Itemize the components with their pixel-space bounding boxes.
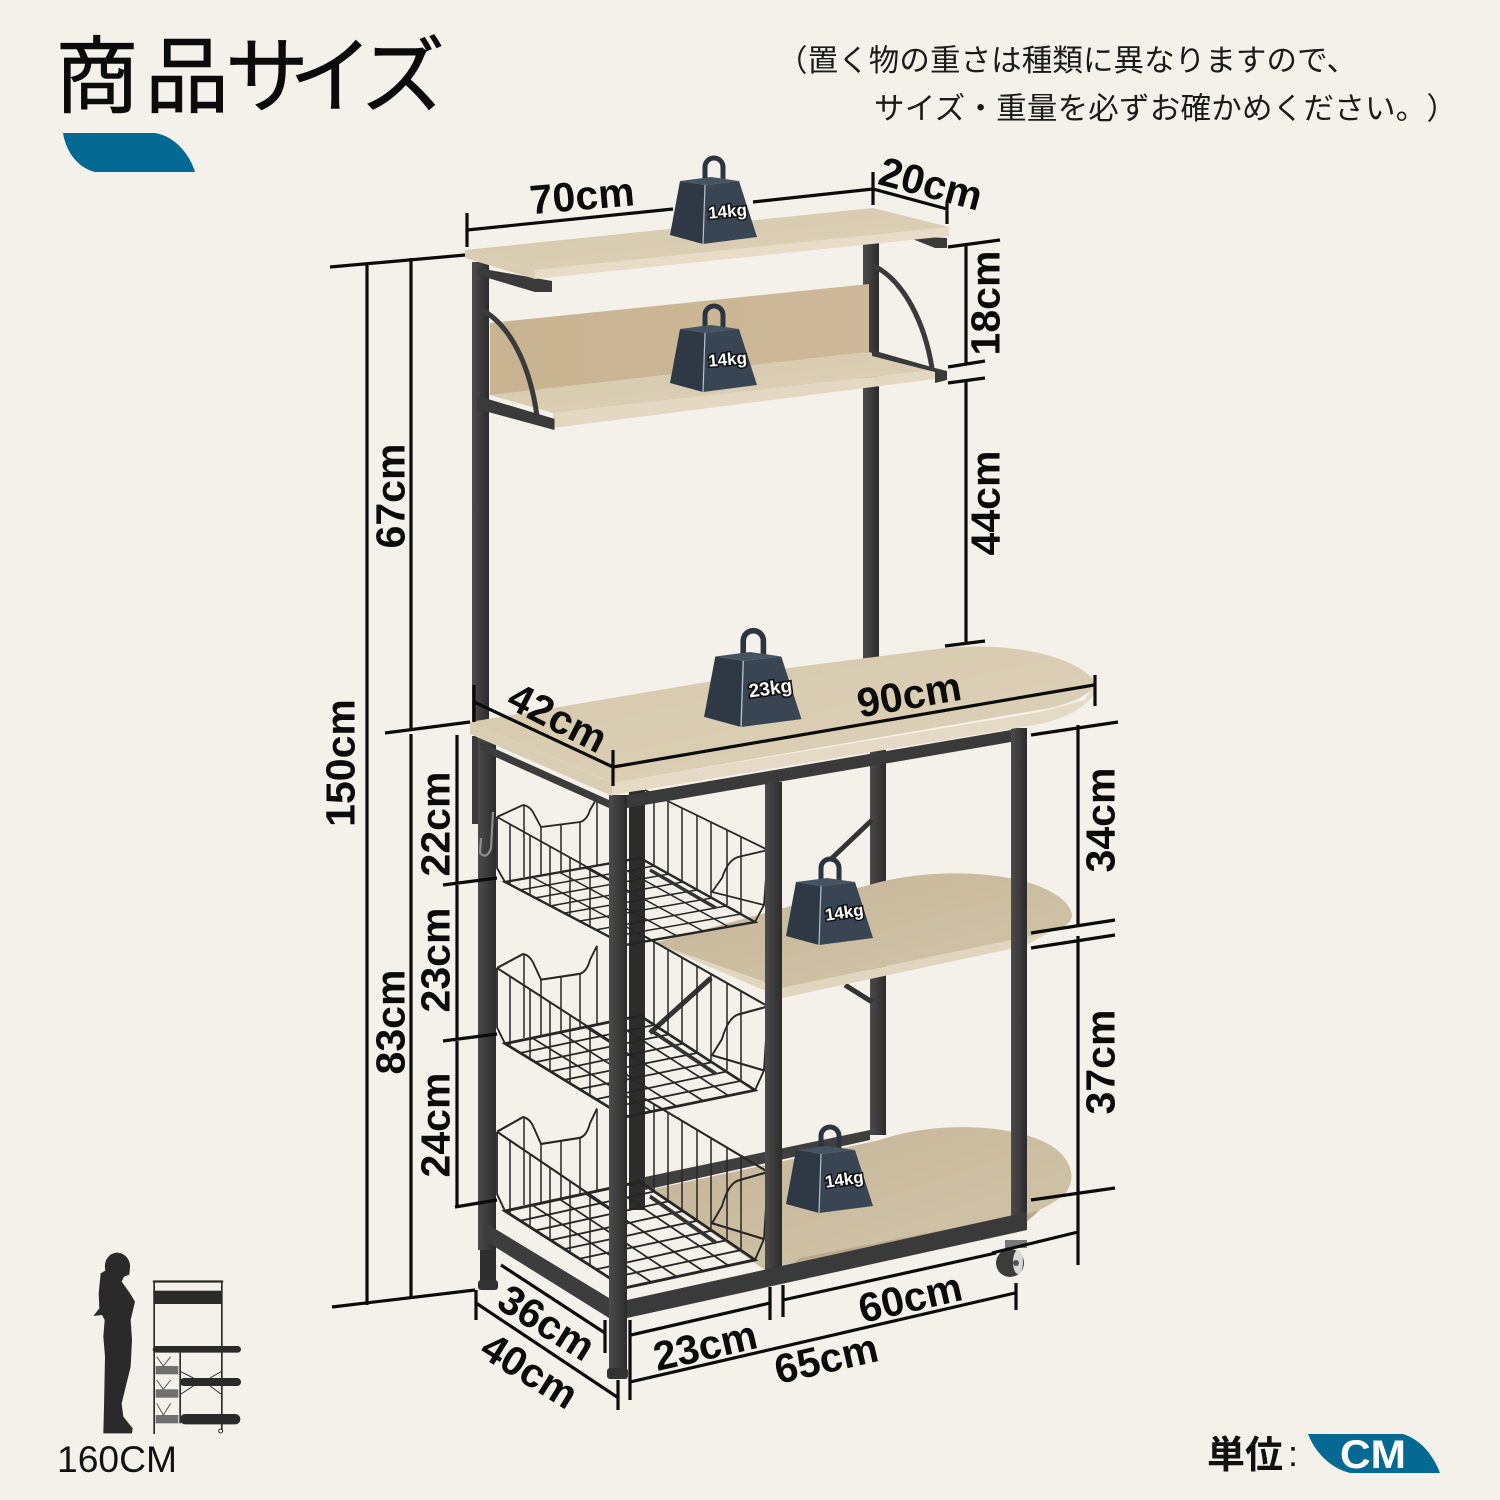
dimension: basket pitch 23cm: 23cm (412, 908, 458, 1012)
icon: miniature rack (153, 1280, 241, 1434)
weight: top shelf 14kg: 14kg (707, 200, 748, 223)
scale label: 160CM (57, 1439, 177, 1480)
dimension: lower section 83cm: 83cm (367, 970, 413, 1074)
dimension: lower shelf gap 37cm: 37cm (1077, 1010, 1123, 1114)
weight: middle shelf 14kg: 14kg (824, 900, 865, 925)
caster wheel (996, 1240, 1027, 1277)
title accent tab (63, 133, 195, 172)
dimension: outer depth 40cm (473, 1290, 618, 1418)
unit badge (1308, 1433, 1440, 1477)
dimension: depth 20cm: 20cm (874, 148, 987, 220)
weight: bottom shelf 14kg (786, 1127, 873, 1213)
dimension: overall height 150cm: 150cm (317, 699, 363, 827)
dimension: inner depth 36cm: 36cm (490, 1275, 603, 1370)
dimension: overall height 150cm (317, 255, 475, 1307)
diagonal braces (650, 820, 872, 1033)
note text: （置く物の重さは種類に異なりますので、 (777, 44, 1357, 78)
dimension: shelf gap 44cm: 44cm (962, 451, 1008, 555)
dimension: frame width 65cm (630, 1283, 1016, 1393)
dimension: open bay 60cm (783, 1253, 996, 1332)
dimension: lower shelf gap 34cm (1031, 722, 1123, 933)
dimension: basket pitch 24cm (412, 1041, 497, 1207)
unit colon: : (1288, 1433, 1298, 1474)
basket 1 (497, 790, 768, 945)
weight: middle shelf 14kg (786, 859, 873, 945)
dimension: width 70cm: 70cm (528, 168, 636, 223)
weight: top shelf 14kg (670, 158, 757, 244)
dimension: lower shelf gap 34cm: 34cm (1077, 768, 1123, 872)
title: 商品サイズ (55, 30, 445, 124)
upper shelf with backboard (479, 265, 947, 428)
dimension: outer depth 40cm: 40cm (473, 1323, 586, 1418)
dimension: shelf gap 44cm (945, 378, 1008, 646)
rack lower rear posts and back beam (629, 750, 886, 1210)
dimension: worktop width 90cm (613, 663, 1095, 786)
dimension: basket bay 23cm: 23cm (649, 1312, 761, 1380)
dimension: width 70cm (467, 168, 873, 247)
dimension: upper section 67cm: 67cm (367, 444, 413, 548)
dimension: basket pitch 24cm: 24cm (412, 1073, 458, 1177)
weight: bottom shelf 14kg: 14kg (824, 1167, 865, 1192)
unit badge: CM (1340, 1433, 1406, 1477)
worktop (470, 647, 1094, 796)
dimension: basket bay 23cm (630, 1287, 770, 1400)
rack front frame (472, 728, 1027, 1379)
weight: upper shelf 14kg: 14kg (707, 348, 748, 371)
dimension: shelf gap 18cm (948, 240, 1008, 367)
hook on side post (480, 812, 493, 856)
rack upper rear posts (472, 240, 879, 727)
bottom shelf (650, 1127, 1071, 1270)
dimension: basket pitch 22cm (412, 735, 497, 885)
dimension: basket pitch 22cm: 22cm (412, 772, 458, 876)
unit label: 単位 (1207, 1435, 1283, 1477)
dimension: basket pitch 23cm (412, 885, 497, 1041)
dimension: worktop depth 42cm: 42cm (500, 673, 615, 762)
top shelf (465, 208, 949, 292)
dimension: worktop width 90cm: 90cm (853, 663, 965, 727)
icon: person silhouette (93, 1253, 135, 1433)
dimension: lower shelf gap 37cm (992, 935, 1123, 1265)
basket 2 (497, 937, 768, 1117)
dimension: frame width 65cm: 65cm (770, 1325, 882, 1393)
basket 3 (497, 1099, 768, 1288)
weight: upper shelf 14kg (670, 306, 757, 392)
dimension: shelf gap 18cm: 18cm (962, 251, 1008, 355)
dimension: open bay 60cm: 60cm (854, 1264, 966, 1332)
weight: worktop 23kg: 23kg (748, 676, 793, 702)
note text: サイズ・重量を必ずお確かめください。） (874, 92, 1457, 126)
note text (777, 44, 1457, 126)
dimension: upper section 67cm (367, 258, 470, 733)
middle shelf (654, 873, 1072, 998)
weight: worktop 23kg (704, 631, 801, 727)
